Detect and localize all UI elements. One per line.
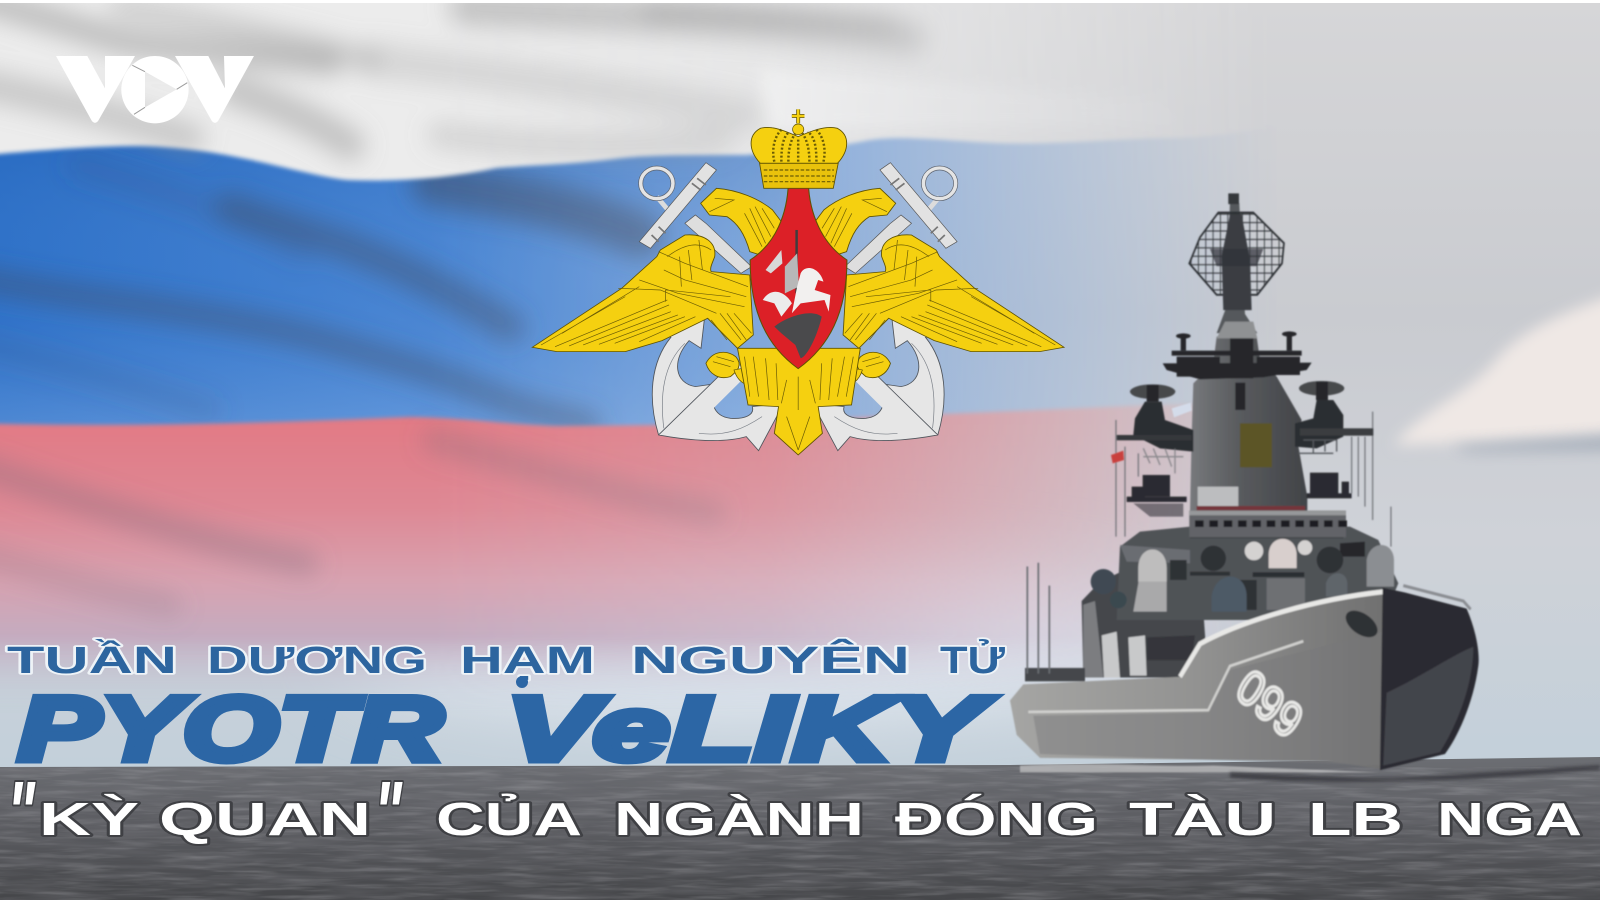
bow rail: [1403, 586, 1471, 609]
flag: white stripe: [0, 3, 1222, 184]
gold panel: [1240, 423, 1272, 467]
title line 1: DƯƠNG: [207, 640, 427, 682]
ship: hull: [1010, 586, 1479, 772]
title line 1: TỬ: [940, 638, 1006, 682]
sea: [0, 757, 1600, 900]
mid weapon boxes: [1127, 473, 1352, 517]
emblem: Saint George: [763, 230, 830, 358]
left radar arm: [1117, 384, 1193, 473]
clouds: [1395, 285, 1600, 452]
radomes: [1091, 539, 1394, 612]
title line 3: NGA: [1437, 793, 1582, 845]
bridge: [1189, 511, 1346, 537]
title line 3: CỦA: [436, 793, 582, 845]
thin masts and stays: [1116, 412, 1391, 547]
logo: shutter cuts: [132, 65, 187, 114]
hull shade: [1033, 632, 1382, 766]
logo: circle with play triangle: [121, 56, 189, 123]
title line 1: NGUYÊN: [631, 638, 910, 682]
hull top white stripe: [1180, 592, 1383, 677]
horizon water line: [1230, 765, 1600, 782]
title line 3: ": [374, 764, 403, 864]
red band: [1197, 506, 1305, 510]
hull side: [1010, 591, 1383, 769]
VOV logo: [56, 56, 254, 123]
emblem: crown: [751, 109, 847, 188]
anchor recess: [1342, 605, 1381, 643]
Russian flag backdrop: [0, 3, 1205, 689]
flag: white stripe folds: [0, 0, 910, 145]
upper platforms: [1163, 331, 1312, 410]
bow wave: [1020, 764, 1380, 772]
ship: superstructure: [1091, 322, 1398, 620]
title line 1: HẠM: [460, 640, 595, 682]
machinery clusters: [1170, 546, 1343, 610]
naval emblem: [532, 109, 1064, 455]
title line 1: [7, 638, 1006, 682]
title line 3: TÀU: [1129, 793, 1276, 845]
ship: radar mast: [1189, 193, 1284, 333]
flag: red stripe shadow folds: [0, 440, 714, 605]
title line 2: ship name: PYOTR: [18, 679, 443, 780]
pale haze near horizon: [340, 570, 1180, 710]
logo: second V: [175, 56, 254, 123]
tower white box: [1198, 487, 1238, 507]
emblem: right half: [813, 163, 1064, 451]
lower block: [1117, 527, 1398, 620]
emblem: red shield: [750, 183, 847, 369]
logo: first V: [56, 56, 135, 123]
title line 3: KỲ QUAN: [39, 793, 371, 845]
title line 2: ship name: VeLIKY: [506, 679, 995, 780]
bow dark side: [1380, 588, 1479, 770]
title line 3: NGÀNH: [614, 793, 864, 845]
ship: aft deck: [1025, 563, 1207, 681]
flag: blue stripe: [0, 136, 1205, 428]
title line 3: LB: [1308, 793, 1403, 845]
title line 1: TUẦN: [7, 638, 177, 682]
title line 3: ĐÓNG: [895, 793, 1098, 845]
right radar arm: [1295, 381, 1373, 453]
tower body: [1190, 337, 1307, 513]
ship: Pyotr Veliky cruiser: [1010, 193, 1479, 772]
title line 3: [7, 764, 1582, 864]
emblem: left half: [532, 163, 784, 451]
flag: white highlights: [770, 81, 788, 118]
flags: [1111, 451, 1124, 463]
dome cap: [1217, 322, 1257, 338]
hull number: 099: [1228, 659, 1311, 750]
bridge windows: [1195, 514, 1348, 534]
emblem: tail: [737, 348, 860, 455]
title line 2: ship name: [18, 679, 995, 780]
title line 3: ": [7, 764, 36, 864]
flag: red stripe: [0, 405, 1192, 689]
flag: blue stripe shadow folds: [0, 165, 640, 425]
